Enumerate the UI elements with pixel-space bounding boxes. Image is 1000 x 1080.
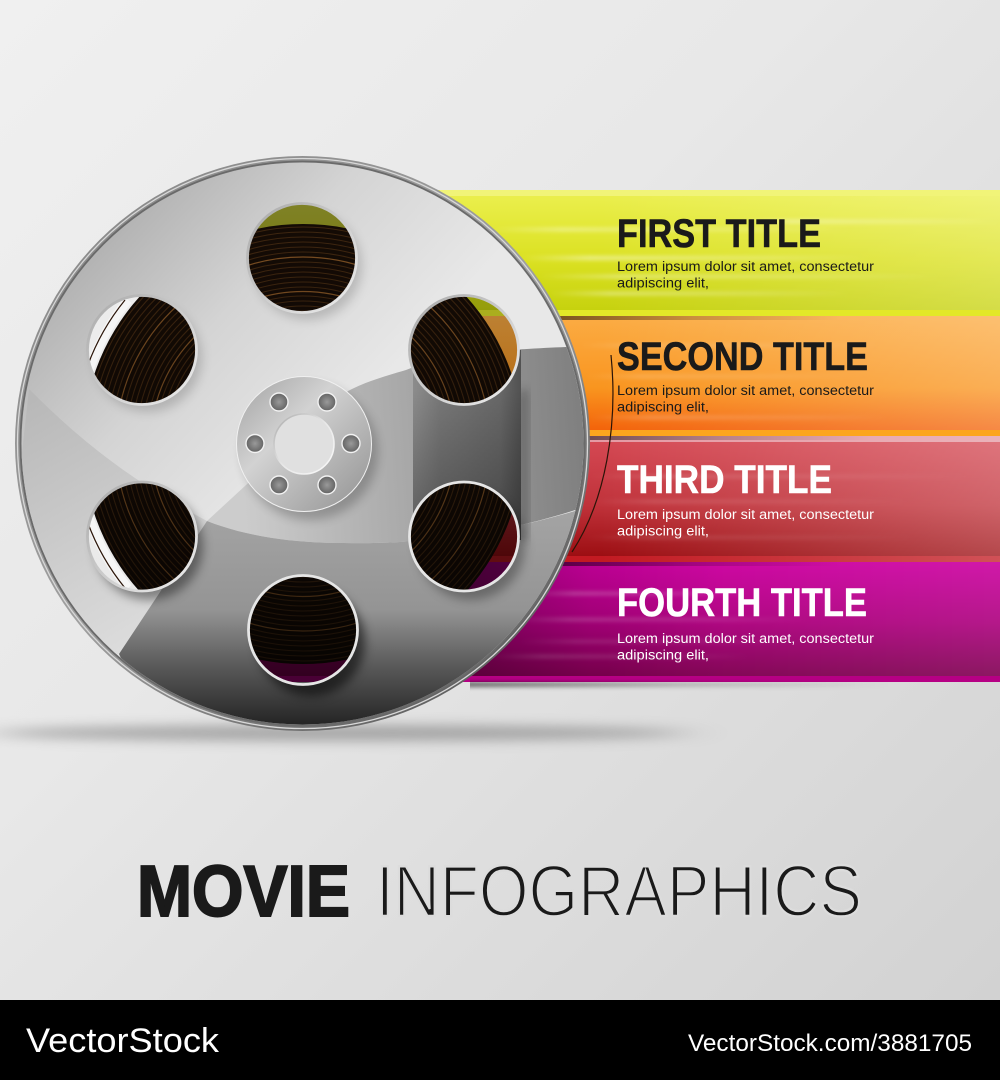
band: magenta fourth [200, 562, 1000, 682]
hole ring: top [248, 204, 356, 312]
panel text: second [617, 335, 875, 414]
centre hub [236, 376, 378, 520]
loose film strand [572, 355, 613, 552]
footer logo: VectorStock [26, 1022, 220, 1060]
footer bar [0, 1000, 1000, 1080]
reel face with holes [0, 150, 600, 760]
film roll behind reel [74, 224, 523, 664]
panel text: third [617, 458, 875, 538]
first body: Lorem ipsum dolor sit amet, consectetur [617, 259, 875, 274]
band: orange second [200, 316, 1000, 436]
panel text: first [617, 212, 875, 290]
hole ring: lower right [410, 482, 518, 591]
hole ring: upper right [410, 296, 518, 404]
panel text: fourth [617, 581, 875, 662]
hub centre hole [274, 414, 334, 474]
reel [0, 150, 600, 760]
hole ring: upper left [88, 296, 196, 404]
second title: SECOND TITLE [617, 335, 868, 379]
third title: THIRD TITLE [617, 458, 832, 502]
band: red third [200, 436, 1000, 562]
hole shading over bands [247, 203, 519, 685]
title word: infographics: INFOGRAPHICS [376, 852, 862, 932]
hub bolts [246, 393, 360, 494]
footer url: VectorStock.com/3881705 [688, 1030, 972, 1057]
first title: FIRST TITLE [617, 212, 821, 256]
fourth title: FOURTH TITLE [617, 581, 867, 625]
band lower shadow [470, 682, 890, 687]
main title [137, 852, 862, 932]
third body: Lorem ipsum dolor sit amet, consectetur [617, 507, 875, 522]
fourth body: adipiscing elit, [617, 648, 709, 662]
reel ground shadow [0, 725, 690, 741]
third body: adipiscing elit, [617, 524, 709, 538]
hole ring: lower left [88, 482, 196, 591]
band: yellow first [200, 190, 1000, 316]
hole ring: bottom [248, 576, 358, 684]
title word: movie: MOVIE [137, 852, 350, 932]
second body: adipiscing elit, [617, 400, 709, 414]
fourth body: Lorem ipsum dolor sit amet, consectetur [617, 631, 875, 646]
first body: adipiscing elit, [617, 276, 709, 290]
second body: Lorem ipsum dolor sit amet, consectetur [617, 383, 875, 398]
